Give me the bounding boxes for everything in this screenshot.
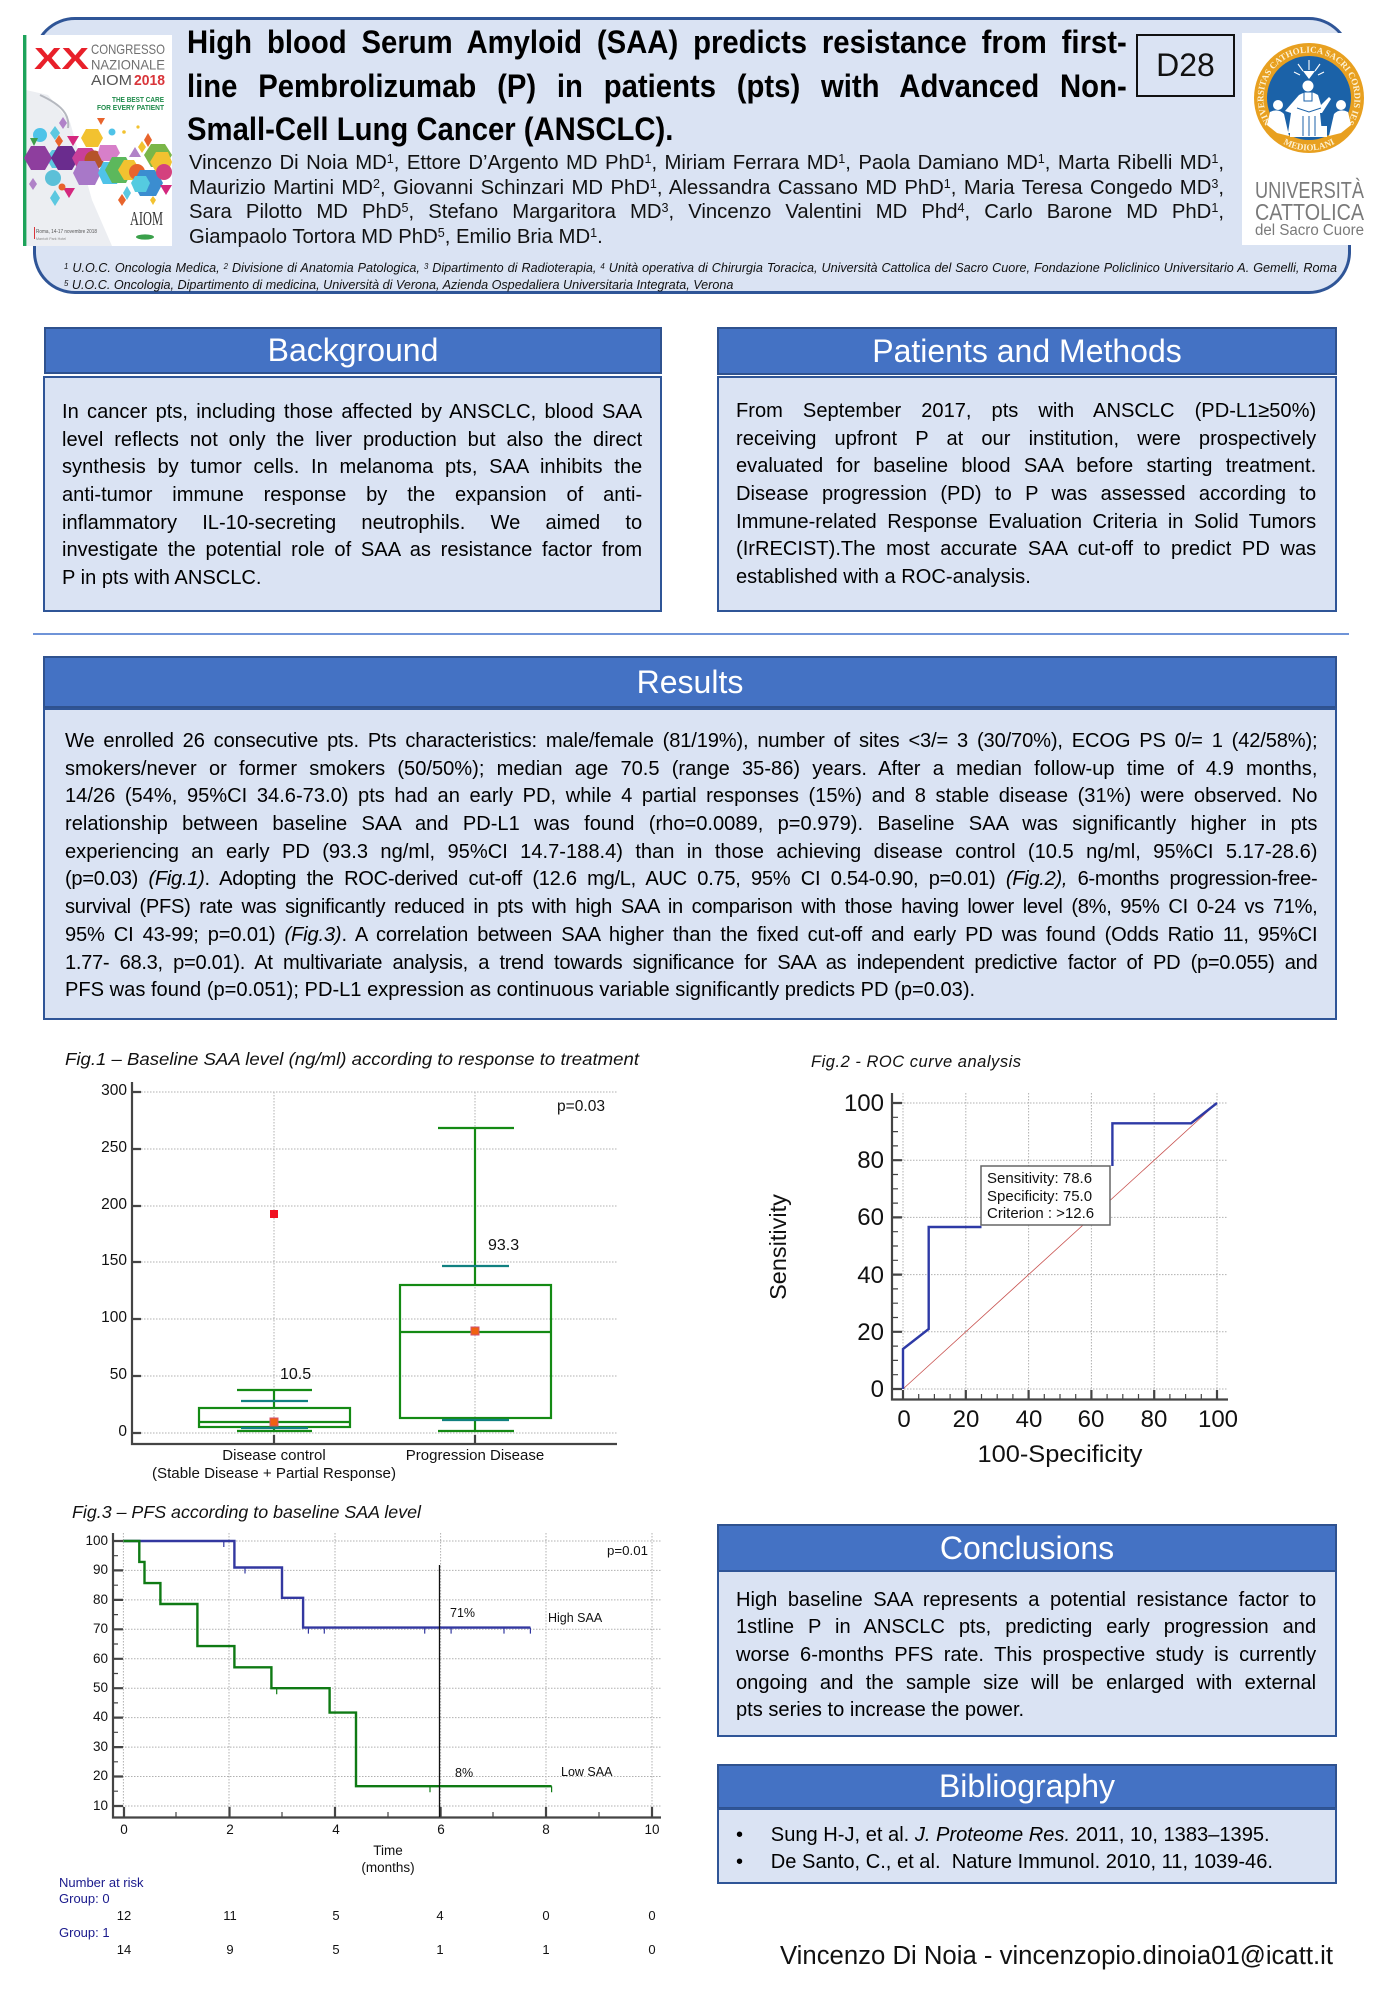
y axis labels: 90 — [93, 1562, 108, 1577]
number at risk table: 9 — [226, 1942, 234, 1957]
ROC curve line — [903, 1103, 1217, 1389]
number at risk table: 0 — [542, 1908, 550, 1923]
bibliography text: • — [736, 1850, 743, 1873]
y axis title: Sensitivity — [765, 1194, 791, 1300]
patients and methods text: Disease progression (PD) to P was assessed according to — [736, 482, 1316, 505]
number at risk table: 0 — [648, 1942, 656, 1957]
background text: anti-tumor immune response by the expansion of anti- — [62, 483, 642, 506]
logo: AIOM 2018 congress: Marriott Park Hotel — [36, 236, 66, 241]
patients and methods text: established with a ROC-analysis. — [736, 565, 1031, 588]
bibliography text — [736, 1822, 1273, 1873]
panel: patients and methods — [717, 327, 1337, 612]
value annotations: 93.3 — [488, 1237, 519, 1254]
curve annotations: 71% — [450, 1606, 475, 1620]
curve annotations: High SAA — [548, 1611, 603, 1625]
curve annotations: 8% — [455, 1766, 473, 1780]
title: Small-Cell Lung Cancer (ANSCLC). — [187, 111, 673, 147]
number at risk table: 14 — [117, 1942, 131, 1957]
background text: P in pts with ANSCLC. — [62, 566, 262, 589]
y axis labels: 250 — [101, 1139, 127, 1156]
y axis labels: 60 — [857, 1204, 884, 1231]
header banner — [33, 17, 1351, 294]
logo: AIOM 2018 congress: XX — [34, 41, 89, 76]
x axis labels: (months) — [361, 1860, 415, 1875]
conclusions text: worse 6-months PFS rate. This prospective study is currently — [736, 1643, 1316, 1666]
logo: AIOM 2018 congress: Roma, 14-17 novembre 2018 — [36, 229, 97, 235]
heading: patients and methods: Patients and Methods — [872, 333, 1182, 369]
x axis labels: 8 — [542, 1822, 550, 1837]
x axis labels: 4 — [332, 1822, 340, 1837]
y axis labels: 100 — [85, 1533, 108, 1548]
heading: background: Background — [268, 332, 438, 368]
heading: conclusions — [717, 1524, 1337, 1572]
poster code box — [1136, 34, 1235, 97]
results text: experiencing an early PD (93.3 ng/ml, 95%CI 14.7-188.4) than in those achieving disease control (10.5 ng/ml, 95%CI 5.17-28.6) — [65, 840, 1317, 863]
number at risk table: 5 — [332, 1942, 340, 1957]
logo: AIOM 2018 congress: AIOM — [130, 208, 163, 230]
heading: bibliography: Bibliography — [939, 1768, 1115, 1804]
value annotations: 10.5 — [280, 1366, 311, 1383]
y axis labels: 300 — [101, 1082, 127, 1099]
number at risk table: 1 — [542, 1942, 550, 1957]
y axis labels: 80 — [857, 1147, 884, 1174]
authors: Giampaolo Tortora MD PhD5, Emilio Bria MD1. — [189, 226, 603, 248]
logo: AIOM 2018 congress: FOR EVERY PATIENT — [97, 103, 164, 112]
results text: smokers/never or former smokers (50/50%); median age 70.5 (range 35-86) years. After a median follow-up time of 4.9 months, — [65, 757, 1317, 780]
conclusions text — [736, 1588, 1316, 1721]
x axis labels: Time — [373, 1843, 403, 1858]
results text: 14/26 (54%, 95%CI 34.6-73.0) pts had an early PD, while 4 partial responses (15%) and 8 stable disease (31%) were observed. No — [65, 784, 1317, 807]
results text: survival (PFS) rate was significantly reduced in pts with high SAA in comparison with those having lower level (8%, 95% CI 0-24 vs 71%, — [65, 895, 1317, 918]
text block: conclusions — [717, 1570, 1337, 1737]
figure 2 caption: Fig.2 - ROC curve analysis — [811, 1053, 1021, 1071]
number at risk table: Group: 0 — [59, 1891, 110, 1906]
logo: AIOM 2018 congress: CONGRESSO — [91, 41, 165, 57]
background text: inflammatory IL-10-secreting neutrophils. We aimed to — [62, 511, 642, 534]
y axis labels: 100 — [844, 1090, 884, 1117]
criterion callout — [981, 1166, 1110, 1225]
bibliography text: Sung H-J, et al. J. Proteome Res. 2011, 10, 1383–1395. — [771, 1822, 1270, 1846]
y axis labels: 200 — [101, 1196, 127, 1213]
text block: background — [43, 376, 662, 612]
y axis labels: 80 — [93, 1592, 108, 1607]
x axis labels: 20 — [953, 1406, 979, 1433]
number at risk table: 1 — [436, 1942, 444, 1957]
heading: background — [44, 327, 662, 374]
x axis labels: 0 — [897, 1406, 911, 1433]
criterion callout: Specificity: 75.0 — [987, 1188, 1092, 1205]
x axis labels: Disease control — [222, 1447, 326, 1464]
logo: Università Cattolica del Sacro Cuore: CATTOLICA — [1255, 199, 1365, 225]
x axis labels: 100 — [1198, 1406, 1238, 1433]
text block: results — [43, 708, 1337, 1020]
results text: relationship between baseline SAA and PD-L1 was found (rho=0.0089, p=0.979). Baseline SAA was significantly higher in pts — [65, 812, 1317, 835]
title: High blood Serum Amyloid (SAA) predicts resistance from first- — [187, 24, 1127, 60]
number at risk table: 5 — [332, 1908, 340, 1923]
results text: 95% CI 43-99; p=0.01) (Fig.3). A correlation between SAA higher than the fixed cut-off and early PD was found (Odds Ratio 11, 95%CI — [65, 923, 1317, 946]
conclusions text: ongoing and the sample size will be enlarged with external — [736, 1671, 1316, 1694]
logo: AIOM 2018 congress: THE BEST CARE — [112, 95, 164, 104]
y axis labels: 0 — [871, 1376, 884, 1403]
results text: We enrolled 26 consecutive pts. Pts characteristics: male/female (81/19%), number of sites <3/= 3 (30/70%), ECOG PS 0/= 1 (42/58%); — [65, 729, 1317, 752]
background text: level reflects not only the liver production but also the direct — [62, 428, 642, 451]
number at risk table: 0 — [648, 1908, 656, 1923]
box: progression disease — [400, 1128, 551, 1431]
number at risk table: 12 — [117, 1908, 131, 1923]
outlier and mean markers — [270, 1210, 479, 1426]
patients and methods text: From September 2017, pts with ANSCLC (PD-L1≥50%) — [736, 399, 1316, 422]
y axis labels: 50 — [110, 1366, 127, 1383]
background text — [62, 400, 642, 589]
x axis labels — [120, 1822, 660, 1875]
results text: PFS was found (p=0.051); PD-L1 expression as continuous variable significantly predicts PD (p=0.03). — [65, 978, 975, 1001]
y axis labels: 0 — [118, 1423, 127, 1440]
box: disease control — [199, 1390, 350, 1431]
y axis labels: 10 — [93, 1798, 108, 1813]
background text: synthesis by tumor cells. In melanoma pts, SAA inhibits the — [62, 455, 642, 478]
logo: Università Cattolica del Sacro Cuore: MEDIOLANI — [1283, 138, 1335, 150]
number at risk table — [59, 1875, 656, 1957]
affiliations — [64, 261, 1337, 292]
y axis labels: 30 — [93, 1739, 108, 1754]
value annotations — [280, 1098, 605, 1383]
conclusions text: pts series to increase the power. — [736, 1698, 1024, 1721]
x axis labels: 40 — [1016, 1406, 1042, 1433]
curve annotations: Low SAA — [561, 1765, 613, 1779]
x axis labels — [152, 1447, 544, 1482]
heading: results — [43, 656, 1337, 708]
number at risk table: Number at risk — [59, 1875, 144, 1890]
y axis labels: 40 — [93, 1709, 108, 1724]
y axis labels: 50 — [93, 1680, 108, 1695]
y axis labels — [844, 1090, 884, 1403]
low SAA curve — [123, 1541, 552, 1792]
y axis labels: 100 — [101, 1309, 127, 1326]
x axis labels: 80 — [1141, 1406, 1167, 1433]
authors: Maurizio Martini MD2, Giovanni Schinzari MD PhD1, Alessandra Cassano MD PhD1, Maria Teresa Congedo MD3, — [189, 176, 1224, 198]
y axis labels: 150 — [101, 1252, 127, 1269]
heading: results: Results — [637, 664, 743, 700]
background text: In cancer pts, including those affected by ANSCLC, blood SAA — [62, 400, 642, 423]
y axis labels: 40 — [857, 1262, 884, 1289]
section divider — [33, 633, 1349, 635]
x axis labels — [897, 1406, 1238, 1433]
conclusions text: 1stline P in ANSCLC pts, predicting early progression and — [736, 1615, 1316, 1638]
y axis labels: 70 — [93, 1621, 108, 1636]
patients and methods text — [736, 399, 1316, 588]
patients and methods text: (IrRECIST).The most accurate SAA cut-off to predict PD was — [736, 537, 1316, 560]
patients and methods text: receiving upfront P at our institution, were prospectively — [736, 427, 1316, 450]
affiliations: 5 U.O.C. Oncologia, Dipartimento di medicina, Università di Verona, Azienda Ospedaliera Universitaria Integrata, Verona — [64, 278, 733, 292]
authors: Vincenzo Di Noia MD1, Ettore D’Argento MD PhD1, Miriam Ferrara MD1, Paola Damiano MD1, Marta Ribelli MD1, — [189, 152, 1224, 174]
x axis labels: (Stable Disease + Partial Response) — [152, 1465, 396, 1482]
reference diagonal — [903, 1103, 1217, 1389]
authors: Sara Pilotto MD PhD5, Stefano Margaritora MD3, Vincenzo Valentini MD Phd4, Carlo Barone MD PhD1, — [189, 201, 1224, 223]
x axis labels: Progression Disease — [406, 1447, 544, 1464]
heading: bibliography — [717, 1764, 1337, 1809]
figure 3: Kaplan-Meier PFS — [59, 1502, 661, 1957]
background text: investigate the potential role of SAA as resistance factor from — [62, 538, 642, 561]
panel: bibliography — [717, 1764, 1337, 1884]
results text: 1.77- 68.3, p=0.01). At multivariate analysis, a trend towards significance for SAA as independent predictive factor of PD (p=0.055) and — [65, 950, 1317, 974]
poster code box: D28 — [1156, 47, 1215, 83]
number at risk table: 11 — [223, 1908, 237, 1923]
affiliations: 1 U.O.C. Oncologia Medica, 2 Divisione di Anatomia Patologica, 3 Dipartimento di Radioterapia, 4 Unità operativa di Chirurgia Toracica, Università Cattolica del Sacro Cuore, Fondazione Policlinico Universitario A. Gemelli, Roma — [64, 261, 1337, 275]
logo: Università Cattolica del Sacro Cuore — [1242, 33, 1365, 245]
conclusions text: High baseline SAA represents a potential resistance factor to — [736, 1588, 1316, 1610]
authors — [189, 152, 1224, 248]
criterion callout: Criterion : >12.6 — [987, 1205, 1094, 1222]
patients and methods text: Immune-related Response Evaluation Criteria in Solid Tumors — [736, 510, 1316, 533]
contact footer: Vincenzo Di Noia - vincenzopio.dinoia01@icatt.it — [780, 1942, 1333, 1970]
panel: conclusions — [717, 1524, 1337, 1737]
figure 1 caption: Fig.1 – Baseline SAA level (ng/ml) according to response to treatment — [65, 1049, 640, 1069]
logo: AIOM 2018 congress — [23, 35, 172, 246]
figure 2: ROC curve — [765, 1053, 1238, 1468]
number at risk table: Group: 1 — [59, 1925, 110, 1940]
bibliography text: De Santo, C., et al. Nature Immunol. 2010, 11, 1039-46. — [771, 1850, 1273, 1873]
figure 1: box plot of baseline SAA — [65, 1049, 640, 1482]
curve annotations — [450, 1544, 648, 1780]
x axis labels: 10 — [644, 1822, 660, 1837]
x axis labels: 0 — [120, 1822, 128, 1837]
y axis labels — [85, 1533, 108, 1813]
heading: patients and methods — [717, 327, 1337, 375]
bibliography text: • — [736, 1822, 743, 1846]
number at risk table: 4 — [436, 1908, 444, 1923]
logo: AIOM 2018 congress: AIOM — [91, 72, 132, 89]
title: line Pembrolizumab (P) in patients (pts) with Advanced Non- — [187, 68, 1127, 104]
patients and methods text: evaluated for baseline blood SAA before starting treatment. — [736, 454, 1316, 477]
logo: Università Cattolica del Sacro Cuore: del Sacro Cuore — [1255, 222, 1364, 239]
heading: conclusions: Conclusions — [940, 1530, 1114, 1566]
x axis labels: 6 — [437, 1822, 445, 1837]
y axis labels: 20 — [93, 1768, 108, 1783]
panel: results — [43, 656, 1337, 1020]
value annotations: p=0.03 — [557, 1098, 605, 1115]
figure 3 caption: Fig.3 – PFS according to baseline SAA level — [72, 1502, 422, 1522]
x axis labels: 60 — [1078, 1406, 1104, 1433]
y axis labels — [101, 1082, 127, 1440]
high SAA curve — [123, 1541, 530, 1634]
logo: AIOM 2018 congress: NAZIONALE — [91, 56, 165, 72]
x axis title: 100-Specificity — [978, 1441, 1142, 1468]
logo: AIOM 2018 congress: 2018 — [134, 72, 165, 89]
reference list — [717, 1808, 1337, 1884]
results text — [65, 729, 1317, 1001]
text block: patients and methods — [717, 376, 1337, 612]
y axis labels: 20 — [857, 1319, 884, 1346]
criterion callout: Sensitivity: 78.6 — [987, 1170, 1092, 1187]
6 month marker — [438, 1565, 440, 1817]
curve annotations: p=0.01 — [607, 1544, 648, 1558]
x axis labels: 2 — [226, 1822, 234, 1837]
panel: background — [43, 327, 662, 612]
y axis labels: 60 — [93, 1651, 108, 1666]
title — [187, 24, 1127, 147]
results text: (p=0.03) (Fig.1). Adopting the ROC-derived cut-off (12.6 mg/L, AUC 0.75, 95% CI 0.54-0.90, p=0.01) (Fig.2), 6-months progression-free- — [65, 867, 1317, 890]
